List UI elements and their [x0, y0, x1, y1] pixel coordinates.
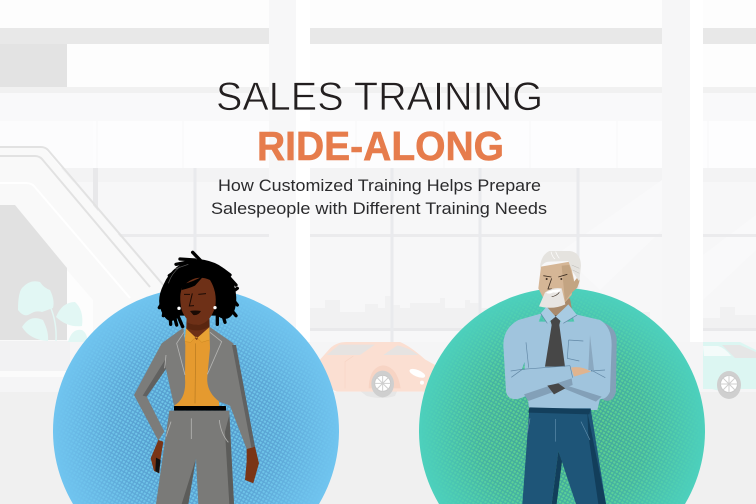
shirt creases	[511, 313, 605, 378]
plant	[18, 281, 87, 342]
belt	[174, 406, 226, 411]
neck	[186, 317, 210, 345]
beard	[539, 288, 565, 308]
right sleeve shadow	[603, 322, 617, 401]
forearm hand	[571, 367, 591, 377]
description: Salespeople with Different Training Needs	[211, 199, 547, 218]
tie	[545, 315, 565, 367]
description: How Customized Training Helps Prepare	[218, 176, 541, 195]
face	[538, 262, 574, 305]
collar	[541, 304, 577, 323]
car: orange	[317, 342, 435, 398]
hair	[159, 252, 237, 327]
blue circle	[53, 288, 339, 504]
hair	[540, 251, 581, 282]
shirt torso	[523, 322, 605, 410]
title: SALES TRAINING	[216, 75, 543, 119]
escalator	[0, 147, 170, 342]
shirt	[174, 328, 219, 408]
green circle	[419, 288, 705, 504]
pants	[156, 411, 234, 504]
jacket	[134, 327, 255, 449]
arms	[503, 313, 612, 399]
pants	[522, 408, 606, 504]
car: teal	[703, 342, 756, 399]
description	[211, 176, 547, 218]
city skyline	[310, 296, 756, 328]
features	[543, 274, 567, 289]
neck	[545, 298, 573, 320]
face	[180, 278, 216, 325]
woman figure	[134, 252, 259, 504]
subtitle highlight: ride-along: RIDE-ALONG	[257, 123, 504, 169]
hands	[151, 440, 259, 483]
man figure	[503, 251, 617, 504]
